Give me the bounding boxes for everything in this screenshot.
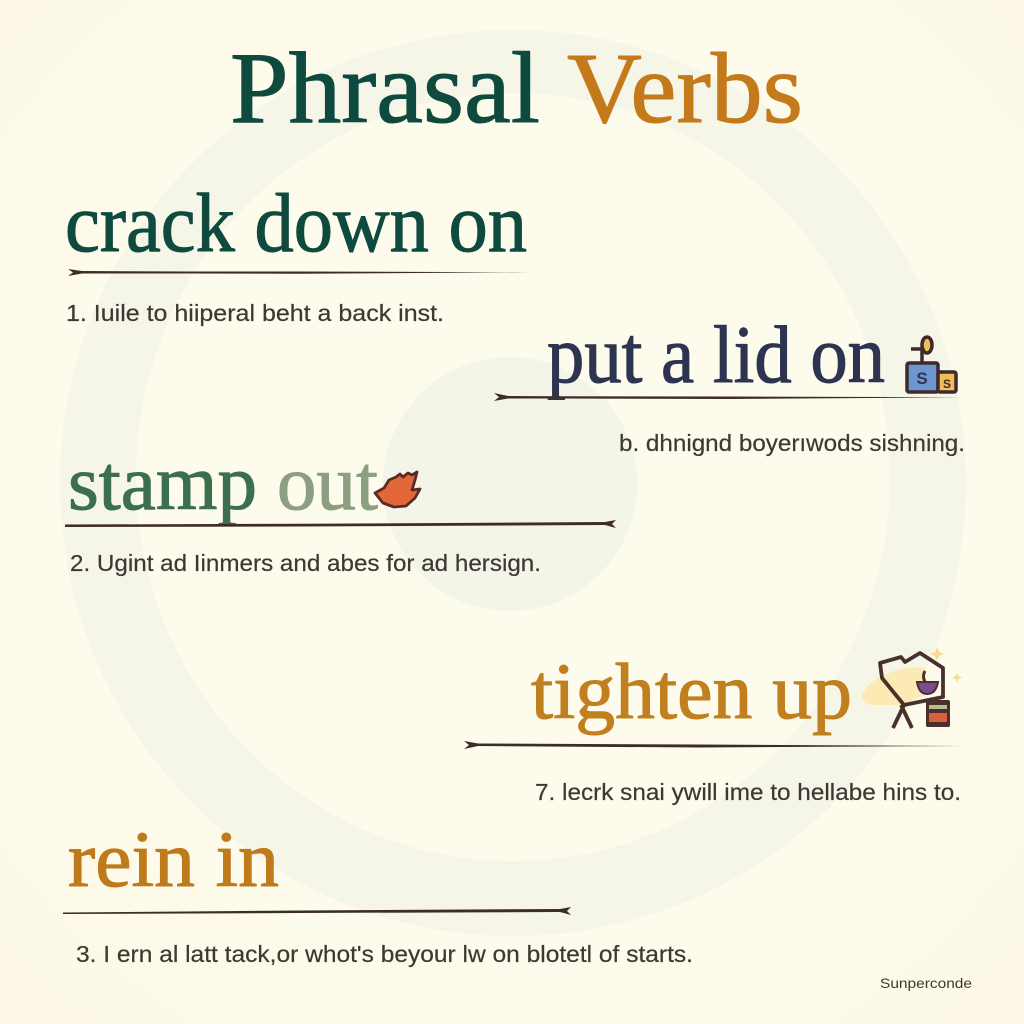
title: Verbs bbox=[567, 32, 803, 144]
entry: tighten up bbox=[464, 647, 964, 805]
entry: stamp out bbox=[65, 439, 616, 576]
rule: put a lid on bbox=[494, 393, 963, 401]
rule: rein in bbox=[63, 907, 571, 915]
icon: easel with mortar and jar bbox=[862, 647, 962, 728]
rule: stamp out bbox=[65, 520, 616, 528]
rule: tighten up bbox=[464, 741, 964, 749]
title bbox=[230, 32, 803, 145]
icon: lid and boxes bbox=[907, 337, 956, 392]
description 2: 2. Ugint ad Iinmers and abes for ad hersign. bbox=[70, 550, 541, 576]
heading: tighten up: tighten up bbox=[531, 649, 852, 736]
heading: rein in: rein in bbox=[68, 817, 279, 904]
heading: stamp out: stamp out bbox=[68, 439, 378, 526]
title: Phrasal bbox=[230, 32, 540, 145]
background spiral bbox=[60, 30, 966, 936]
description 1: 1. Iuile to hiiperal beht a back inst. bbox=[66, 300, 444, 326]
entry: put a lid on bbox=[494, 309, 965, 456]
description 3: 3. I ern al latt tack,or whot's beyour lw on blotetl of starts. bbox=[76, 941, 693, 967]
entry: rein in bbox=[63, 817, 693, 967]
heading: put a lid on: put a lid on bbox=[547, 309, 885, 400]
icon: lid and boxes: S bbox=[943, 377, 951, 391]
entry: crack down on bbox=[65, 177, 530, 326]
heading: crack down on: crack down on bbox=[65, 177, 527, 270]
rule: crack down on bbox=[68, 269, 530, 276]
description 7: 7. lecrk snai ywill ime to hellabe hins to. bbox=[535, 779, 961, 805]
icon: lid and boxes: S bbox=[916, 369, 928, 388]
icon: leaf bbox=[375, 472, 420, 507]
footer credit: Sunperconde bbox=[880, 975, 972, 991]
description b: b. dhnignd boyerıwods sishning. bbox=[619, 430, 965, 456]
